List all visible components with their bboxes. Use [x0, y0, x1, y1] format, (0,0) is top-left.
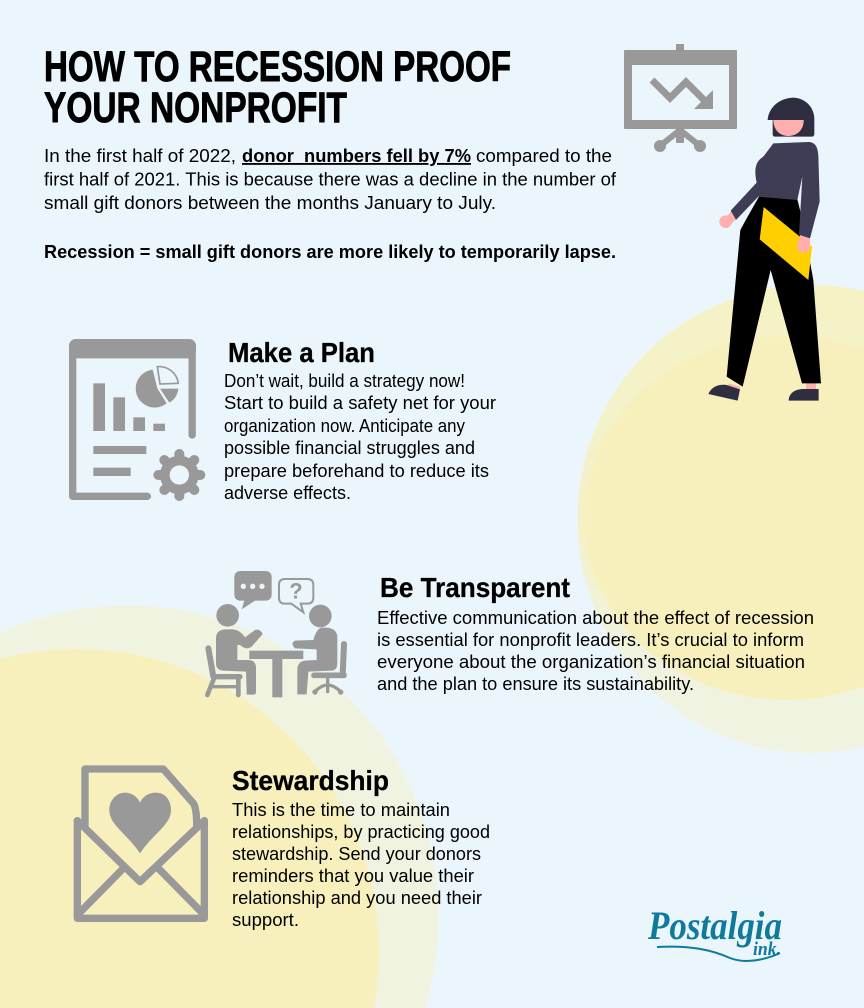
- intro text: compared to the: [476, 145, 612, 166]
- section: be transparent: [207, 571, 814, 697]
- text: make a plan: possible financial struggles and: [224, 437, 475, 458]
- title: HOW TO RECESSION PROOF: [44, 43, 511, 91]
- heading: stewardship: Stewardship: [232, 765, 389, 796]
- background circle: right: [577, 285, 864, 753]
- intro text: first half of 2021. This is because there was a decline in the number of: [44, 168, 617, 190]
- text: make a plan: prepare beforehand to reduce its: [224, 460, 489, 481]
- text: stewardship: relationship and you need their: [232, 887, 482, 908]
- illustration: standing woman with folder: [708, 98, 821, 401]
- text: stewardship: support.: [232, 909, 299, 930]
- intro text: [44, 145, 617, 262]
- text: stewardship: reminders that you value their: [232, 865, 474, 886]
- title: YOUR NONPROFIT: [44, 84, 347, 132]
- text: be transparent: [377, 607, 814, 694]
- text: make a plan: Start to build a safety net for your: [224, 392, 496, 413]
- section: make a plan: [69, 337, 496, 503]
- logo: postalgia ink: Postalgia: [647, 903, 782, 948]
- logo: postalgia ink: ink.: [753, 939, 781, 960]
- text: make a plan: organization now. Anticipate any: [224, 415, 466, 436]
- heading: be transparent: Be Transparent: [380, 572, 570, 603]
- text: be transparent: and the plan to ensure its sustainability.: [377, 673, 694, 694]
- icon: report with charts and gear: [69, 339, 200, 496]
- title: [44, 43, 511, 132]
- icon: two people talking at a table: [207, 571, 344, 697]
- text: be transparent: everyone about the organization’s financial situation: [377, 651, 805, 672]
- text: be transparent: Effective communication about the effect of recession: [377, 607, 814, 628]
- icon: two people talking at a table: ?: [289, 579, 303, 604]
- text: stewardship: relationships, by practicing good: [232, 821, 490, 842]
- text: make a plan: adverse effects.: [224, 482, 351, 503]
- logo: postalgia ink: [647, 903, 782, 961]
- heading: make a plan: Make a Plan: [228, 337, 375, 368]
- background circle: bottom left: [0, 606, 439, 1008]
- intro text: small gift donors between the months January to July.: [44, 192, 496, 213]
- icon: presentation board with falling chart: [624, 44, 737, 152]
- text: stewardship: [232, 799, 490, 930]
- text: stewardship: This is the time to maintain: [232, 799, 450, 820]
- intro text: In the first half of 2022,: [44, 145, 236, 166]
- text: be transparent: is essential for nonprofit leaders. It’s crucial to inform: [377, 629, 804, 650]
- text: make a plan: Don’t wait, build a strategy now!: [224, 370, 465, 391]
- section: stewardship: [77, 765, 490, 930]
- intro text: Recession = small gift donors are more likely to temporarily lapse.: [44, 241, 616, 262]
- icon: envelope with heart letter: [77, 769, 204, 918]
- text: make a plan: [224, 370, 496, 503]
- intro text: donor numbers fell by 7%: [242, 145, 471, 166]
- text: stewardship: stewardship. Send your donors: [232, 843, 481, 864]
